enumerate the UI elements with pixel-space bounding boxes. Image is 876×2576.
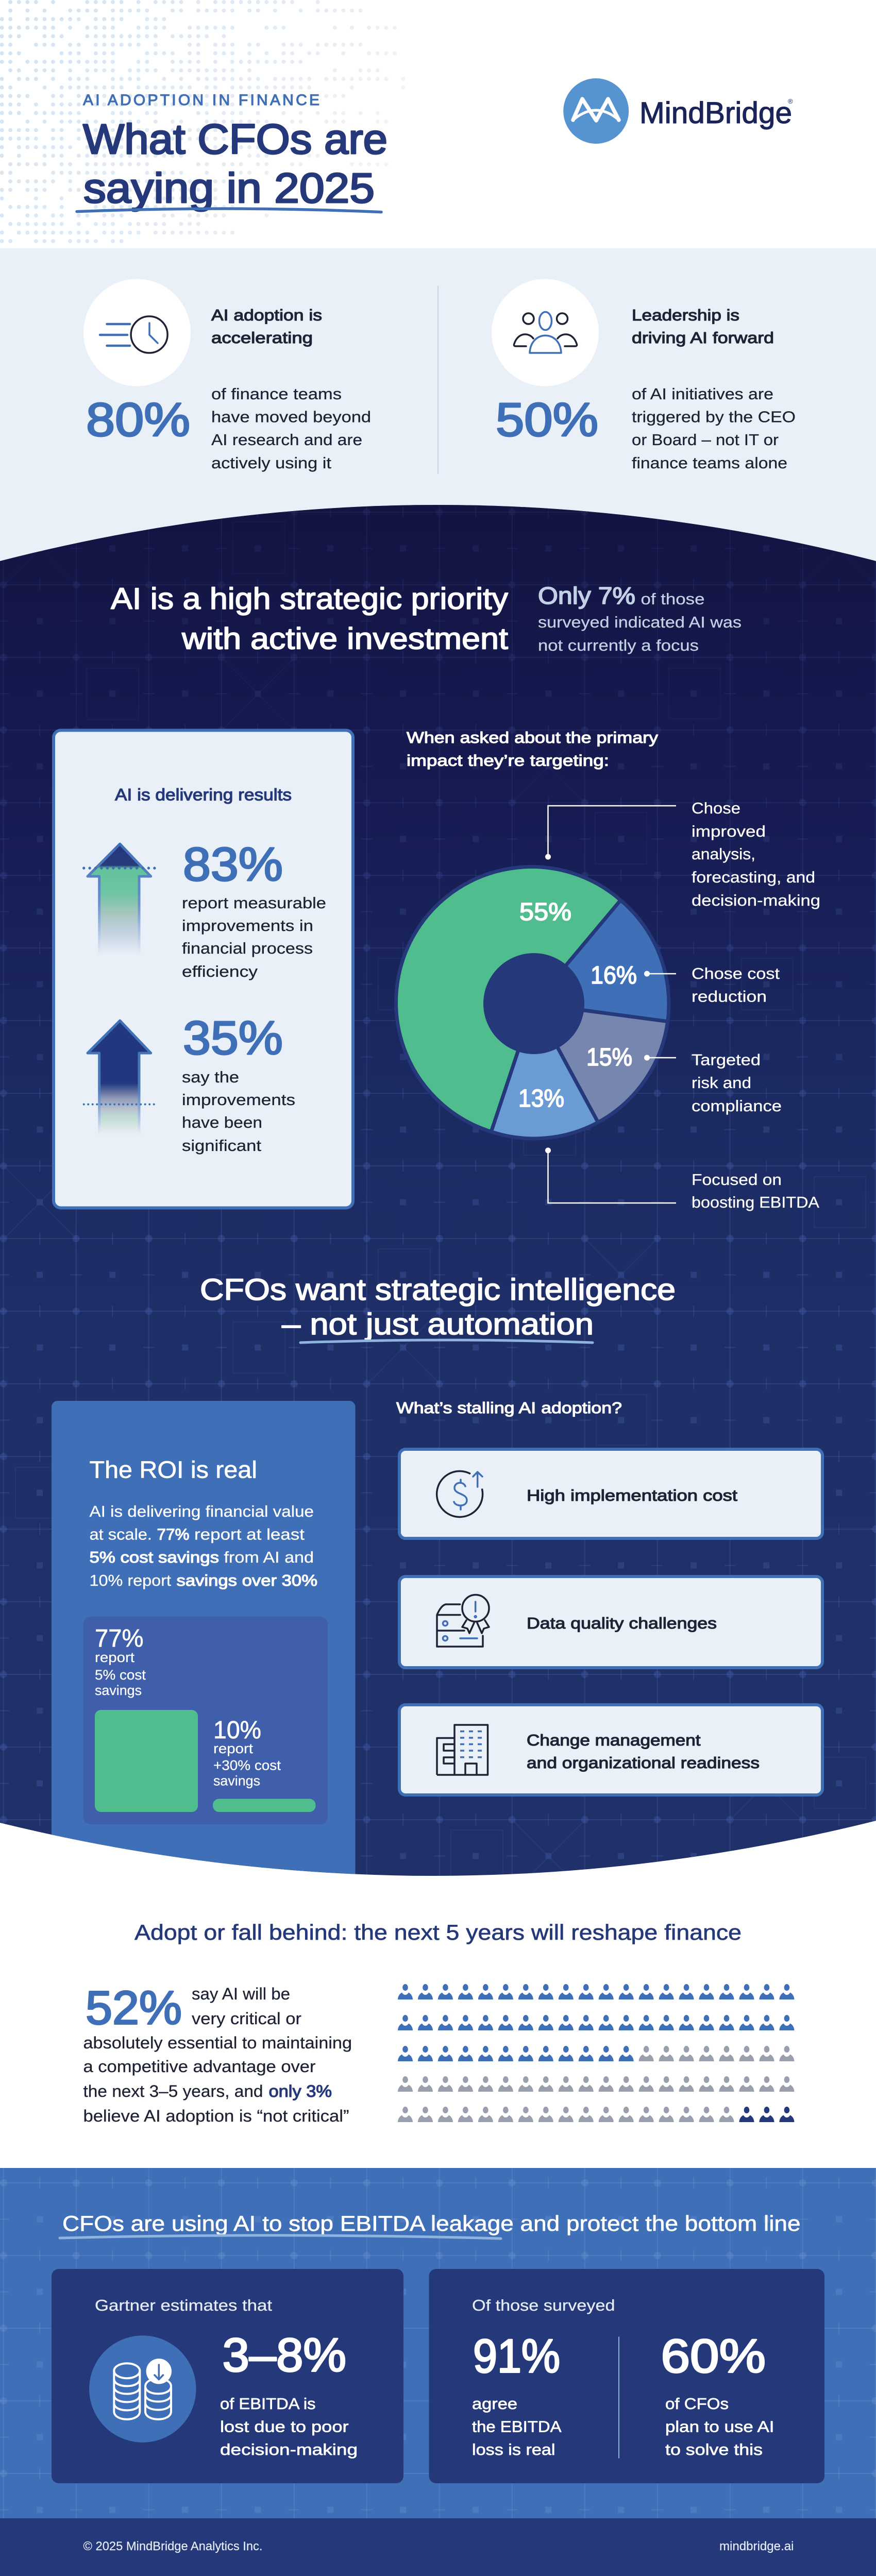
panel: AI is delivering results: have been [182, 1113, 262, 1131]
panel: AI is delivering results: 35% [183, 1012, 283, 1064]
callout: cost reduction 16%: reduction [692, 987, 767, 1006]
logo: MindBridge: ® [788, 97, 793, 105]
panel: AI is delivering results: efficiency [182, 962, 258, 980]
icon: office building [437, 1725, 487, 1775]
callout: risk and compliance 15%: risk and [692, 1074, 751, 1092]
title: saying in 2025 [83, 165, 375, 212]
panel: AI is delivering results: say the [182, 1068, 239, 1086]
stat: leadership driving AI [492, 279, 796, 472]
card: of those surveyed [429, 2269, 824, 2483]
donut chart: primary impact: 16% [591, 962, 637, 989]
heading: primary impact: impact they’re targeting: [407, 751, 609, 770]
callout: risk and compliance 15%: Targeted [692, 1051, 761, 1069]
stat: leadership driving AI: driving AI forward [632, 329, 774, 347]
icon: dollar with up arrow [437, 1471, 483, 1517]
card: change management: Change management [527, 1731, 701, 1749]
card: of those surveyed: 91% [473, 2330, 560, 2382]
text block: 52% say AI will be critical [83, 1981, 352, 2125]
stat: AI adoption accelerating: have moved beyond [211, 408, 371, 426]
callout: improved analysis 55%: analysis, [692, 845, 755, 863]
stat: leadership driving AI: 50% [496, 394, 598, 446]
callout: boosting EBITDA 13%: Focused on [692, 1171, 782, 1189]
panel: AI is delivering results [54, 731, 353, 1208]
callout: improved analysis 55%: improved [692, 822, 766, 840]
panel: AI is delivering results: 83% [183, 838, 283, 891]
callout: risk and compliance 15% [644, 1051, 782, 1115]
footer [0, 2518, 876, 2576]
heading: AI is a high strategic priority: with active investment [181, 622, 508, 655]
chart: savings bars: 5% cost [95, 1667, 146, 1683]
callout: only 7%: Only 7% [538, 582, 635, 609]
eyebrow label: AI ADOPTION IN FINANCE [83, 92, 319, 109]
panel: EBITDA leakage section [0, 2168, 876, 2518]
heading: what's stalling AI adoption: What’s stalling AI adoption? [396, 1399, 622, 1417]
panel: the ROI is real [52, 1401, 356, 1916]
chart: savings bars: savings [213, 1773, 260, 1789]
chart: savings bars: savings [95, 1683, 142, 1698]
heading: primary impact [407, 728, 659, 770]
logo: MindBridge: MindBridge [639, 96, 792, 130]
callout: only 7% [538, 582, 742, 654]
chart: people pictogram 100 icons [398, 1984, 794, 2122]
icon: clock with speed lines [100, 316, 167, 353]
panel: dark section background [0, 500, 876, 1932]
donut chart: primary impact: 13% [518, 1085, 564, 1112]
stat: leadership driving AI: triggered by the CEO [632, 408, 796, 426]
card: Gartner estimate: Gartner estimates that [95, 2296, 272, 2314]
text block: 52% say AI will be critical: the next 3–5 years, and [83, 2082, 263, 2100]
card: high implementation cost: High implementation cost [527, 1486, 737, 1504]
callout: only 7%: surveyed indicated AI was [538, 613, 742, 631]
chart: savings bars: report [213, 1741, 254, 1756]
logo: MindBridge [563, 78, 793, 144]
card: Gartner estimate: decision-making [220, 2441, 358, 2459]
callout: cost reduction 16%: Chose cost [692, 964, 780, 982]
heading: CFOs want strategic intelligence [200, 1273, 676, 1343]
panel: the ROI is real: savings over 30% [176, 1571, 317, 1589]
card: Gartner estimate: of EBITDA is [220, 2395, 315, 2413]
icon: server with badge [437, 1595, 489, 1647]
stat: AI adoption accelerating: actively using it [211, 454, 331, 472]
card: change management: and organizational readiness [527, 1754, 760, 1772]
stat: AI adoption accelerating [83, 279, 371, 472]
icon: navy up arrow [84, 1021, 156, 1135]
text block: 52% say AI will be critical: say AI will be [192, 1985, 290, 2003]
heading: primary impact: When asked about the primary [407, 728, 659, 747]
callout: only 7%: not currently a focus [538, 636, 699, 654]
callout: boosting EBITDA 13% [545, 1148, 819, 1211]
card: data quality challenges [399, 1577, 822, 1668]
heading: adopt or fall behind: Adopt or fall behind: the next 5 years will reshape finance [134, 1920, 742, 1944]
stat: leadership driving AI: or Board – not IT or [632, 431, 779, 449]
icon: green up arrow [84, 844, 156, 956]
stat: leadership driving AI: finance teams alone [632, 454, 787, 472]
callout: risk and compliance 15%: compliance [692, 1097, 782, 1115]
card: Gartner estimate [52, 2269, 403, 2483]
callout: only 7%: of those [641, 590, 705, 608]
callout: improved analysis 55%: Chose [692, 799, 740, 817]
donut chart: primary impact: 15% [586, 1044, 632, 1071]
card: of those surveyed: agree [472, 2395, 517, 2413]
panel: AI is delivering results: improvements [182, 1091, 295, 1109]
panel: the ROI is real: 77% [157, 1525, 190, 1544]
callout: cost reduction 16% [644, 964, 780, 1006]
card: data quality challenges: Data quality challenges [527, 1614, 717, 1632]
card: high implementation cost [399, 1449, 822, 1538]
donut chart: primary impact [396, 867, 669, 1139]
card: of those surveyed: plan to use AI [665, 2417, 774, 2436]
text block: 52% say AI will be critical: absolutely essential to maintaining [83, 2033, 352, 2052]
panel: AI is delivering results: significant [182, 1137, 261, 1155]
stat: leadership driving AI: Leadership is [632, 306, 739, 324]
chart: savings bars: +30% cost [213, 1758, 281, 1773]
title [77, 116, 388, 212]
panel: AI is delivering results: AI is delivering results [115, 785, 292, 804]
donut chart: primary impact: 55% [519, 899, 571, 926]
footer: mindbridge.ai [719, 2539, 794, 2553]
callout: improved analysis 55% [545, 799, 820, 909]
chart: savings bars [83, 1617, 328, 1824]
panel: AI is delivering results: report measurable [182, 894, 326, 912]
chart: savings bars: report [95, 1650, 135, 1665]
card: of those surveyed: of CFOs [665, 2395, 729, 2413]
panel: the ROI is real: 10% report [90, 1571, 171, 1589]
panel: AI is delivering results: improvements in [182, 917, 313, 935]
heading: AI is a high strategic priority [111, 582, 508, 655]
stat: AI adoption accelerating: of finance teams [211, 385, 342, 403]
panel: the ROI is real: from AI and [224, 1548, 314, 1566]
card: of those surveyed: 60% [661, 2330, 766, 2382]
stat: AI adoption accelerating: 80% [86, 394, 190, 446]
panel: stats band [0, 248, 876, 609]
text block: 52% say AI will be critical: believe AI adoption is “not critical” [83, 2107, 349, 2125]
chart: savings bars: 10% [213, 1717, 261, 1744]
stat: AI adoption accelerating: AI research and are [211, 431, 362, 449]
panel: the ROI is real: AI is delivering financial value [90, 1502, 314, 1520]
icon: coin stacks with down arrow [89, 2335, 196, 2443]
stat: leadership driving AI: of AI initiatives are [632, 385, 773, 403]
heading: AI is a high strategic priority: AI is a high strategic priority [111, 582, 508, 616]
panel: the ROI is real: at scale. [90, 1525, 152, 1544]
text block: 52% say AI will be critical: very critical or [192, 2009, 301, 2028]
card: of those surveyed: to solve this [665, 2441, 763, 2459]
card: change management [399, 1705, 822, 1795]
card: of those surveyed: the EBITDA [472, 2417, 562, 2436]
title: What CFOs are [83, 116, 388, 163]
callout: boosting EBITDA 13%: boosting EBITDA [692, 1193, 819, 1211]
footer: © 2025 MindBridge Analytics Inc. [83, 2539, 263, 2553]
heading: CFOs want strategic intelligence: CFOs want strategic intelligence [200, 1273, 676, 1307]
text block: 52% say AI will be critical: 52% [86, 1981, 182, 2034]
text block: 52% say AI will be critical: only 3% [269, 2082, 332, 2100]
heading: CFOs want strategic intelligence: – not just automation [282, 1308, 594, 1341]
icon: three people [514, 312, 577, 353]
callout: improved analysis 55%: decision-making [692, 891, 820, 909]
card: of those surveyed: loss is real [472, 2441, 555, 2459]
heading: stop EBITDA leakage: CFOs are using AI to stop EBITDA leakage and protect the bottom line [62, 2211, 801, 2235]
card: Gartner estimate: lost due to poor [220, 2417, 348, 2436]
panel: the ROI is real: 5% cost savings [90, 1548, 219, 1566]
panel: the ROI is real: report at least [194, 1525, 305, 1544]
panel: the ROI is real: The ROI is real [90, 1456, 257, 1483]
callout: improved analysis 55%: forecasting, and [692, 868, 815, 886]
header: dot matrix decoration [2, 2, 403, 241]
card: Gartner estimate: 3–8% [223, 2329, 346, 2381]
chart: savings bars: 77% [95, 1625, 143, 1652]
stat: AI adoption accelerating: accelerating [211, 329, 313, 347]
card: of those surveyed: Of those surveyed [472, 2296, 615, 2314]
stat: AI adoption accelerating: AI adoption is [211, 306, 322, 324]
text block: 52% say AI will be critical: a competitive advantage over [83, 2057, 316, 2076]
panel: AI is delivering results: financial process [182, 939, 313, 957]
